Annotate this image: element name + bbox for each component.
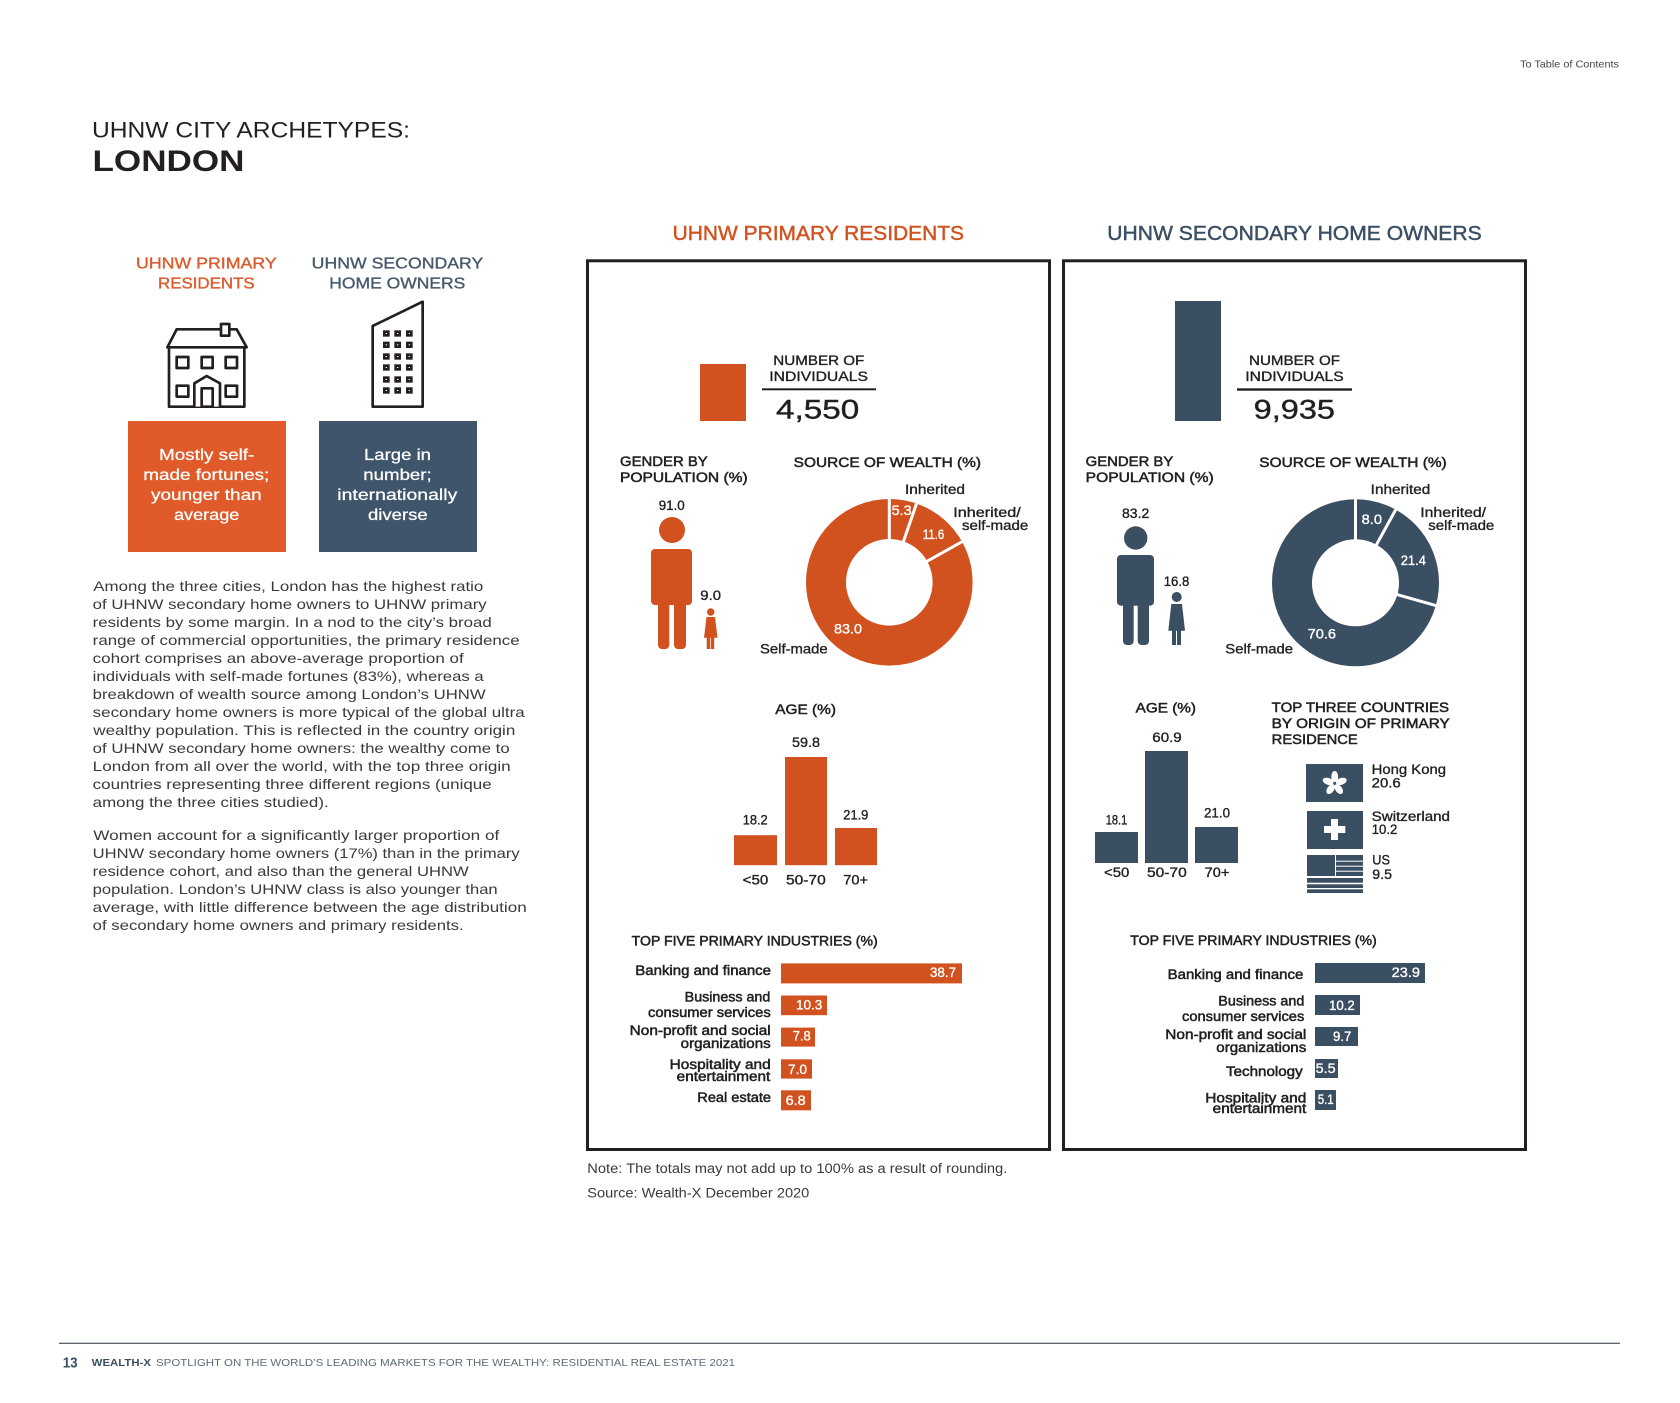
chart: top five primary industries: Banking and finance	[1168, 967, 1303, 982]
icon: woman	[704, 608, 718, 649]
chart: age: 18.2	[743, 812, 768, 828]
callout: secondary home owners summary: internationally	[337, 487, 457, 504]
body text: paragraph one: among the three cities studied).	[93, 794, 329, 810]
body text: paragraph two: residence cohort, and also than the general UHNW	[93, 863, 470, 879]
list: top three countries by origin: BY ORIGIN OF PRIMARY	[1272, 716, 1450, 731]
heading: primary residents	[136, 255, 277, 292]
chart: source of wealth donut: 8.0	[1362, 512, 1382, 527]
chart: source of wealth donut: 5.3	[892, 503, 912, 518]
chart: gender by population: GENDER BY	[1086, 454, 1173, 469]
chart: top five primary industries: 38.7	[930, 965, 956, 980]
chart: source of wealth donut: Inherited/	[1420, 505, 1486, 520]
note and source: Note: The totals may not add up to 100% as a result of rounding.	[587, 1161, 1007, 1176]
body text: paragraph two: of secondary home owners and primary residents.	[93, 917, 464, 933]
list: top three countries by origin	[1272, 700, 1450, 893]
chart: top five primary industries: consumer services	[648, 1005, 771, 1020]
icon: us flag	[1307, 855, 1363, 893]
chart: top five primary industries: consumer services	[1182, 1009, 1305, 1024]
chart: source of wealth donut: 83.0	[834, 622, 862, 637]
body text: paragraph one: residents by some margin. In a nod to the city’s broad	[93, 614, 492, 630]
chart: top five primary industries: TOP FIVE PRIMARY INDUSTRIES (%)	[1130, 933, 1377, 948]
list: top three countries by origin: Hong Kong	[1372, 762, 1446, 777]
icon: switzerland flag	[1307, 811, 1363, 849]
body text: paragraph one: cohort comprises an above-average proportion of	[93, 650, 464, 666]
chart: top five primary industries: Business and	[1218, 993, 1304, 1008]
chart: top five primary industries: organizations	[681, 1036, 771, 1051]
chart: top five primary industries: 6.8	[786, 1093, 806, 1108]
chart: age: <50	[1104, 865, 1129, 880]
body text: paragraph one: wealthy population. This is reflected in the country origin	[92, 722, 515, 738]
body text: paragraph one: individuals with self-made fortunes (83%), whereas a	[93, 668, 484, 684]
callout: primary residents summary: made fortunes;	[143, 467, 269, 484]
chart: top five primary industries: TOP FIVE PRIMARY INDUSTRIES (%)	[632, 934, 878, 948]
chart: age: AGE (%)	[1136, 700, 1196, 715]
metric: number of individuals: 9,935	[1254, 394, 1335, 424]
footer	[59, 1343, 1620, 1372]
chart: top five primary industries: 5.5	[1316, 1061, 1336, 1076]
title: UHNW CITY ARCHETYPES:	[92, 118, 410, 143]
archetype: secondary home owners	[312, 255, 484, 552]
icon: man	[1117, 526, 1154, 645]
metric: number of individuals: 4,550	[776, 394, 859, 424]
chart: top five primary industries: 5.1	[1318, 1092, 1334, 1107]
chart: top five primary industries: entertainment	[1213, 1101, 1307, 1116]
body text: paragraph one: breakdown of wealth source among London’s UHNW	[93, 686, 487, 702]
heading: primary residents: UHNW PRIMARY	[136, 255, 277, 272]
heading: secondary home owners: HOME OWNERS	[329, 275, 465, 292]
chart: age: 21.9	[843, 808, 868, 823]
body text: paragraph two: UHNW secondary home owners (17%) than in the primary	[93, 845, 520, 861]
chart: age: 70+	[1205, 865, 1229, 880]
chart: top five primary industries: Banking and finance	[635, 963, 771, 978]
callout: secondary home owners summary: Large in	[364, 447, 431, 464]
chart: gender by population: 16.8	[1164, 574, 1189, 589]
chart: source of wealth donut	[1225, 455, 1494, 656]
callout: secondary home owners summary	[319, 421, 477, 552]
chart: source of wealth donut	[760, 455, 1028, 656]
note and source: Source: Wealth-X December 2020	[587, 1186, 809, 1201]
chart: source of wealth donut: Inherited	[905, 482, 965, 497]
chart: top five primary industries: organizations	[1216, 1040, 1307, 1055]
icon: tower	[373, 302, 423, 407]
chart: source of wealth donut: 21.4	[1401, 553, 1426, 568]
body text: paragraph one: range of commercial opportunities, the primary residence	[93, 632, 520, 648]
chart: source of wealth donut: SOURCE OF WEALTH (%)	[794, 455, 981, 470]
chart: source of wealth donut: 70.6	[1308, 627, 1336, 642]
chart: gender by population	[620, 454, 748, 649]
chart: source of wealth donut: self-made	[962, 518, 1028, 533]
chart: age	[734, 702, 877, 888]
chart: top five primary industries: Business and	[685, 989, 770, 1004]
chart: gender by population: GENDER BY	[620, 454, 708, 469]
heading: secondary home owners: UHNW SECONDARY	[312, 255, 484, 272]
list: top three countries by origin: 9.5	[1372, 867, 1392, 882]
body text: paragraph one	[92, 578, 525, 810]
chart: top five primary industries: Technology	[1226, 1064, 1303, 1079]
body text: paragraph one: of UHNW secondary home owners to UHNW primary	[93, 596, 487, 612]
body text: paragraph two: Women account for a significantly larger proportion of	[93, 827, 499, 843]
body text: paragraph one: Among the three cities, London has the highest ratio	[93, 578, 484, 594]
body text: paragraph one: secondary home owners is more typical of the global ultra	[93, 704, 525, 720]
panel: primary residents	[588, 261, 1050, 1150]
metric: number of individuals: INDIVIDUALS	[769, 369, 868, 384]
heading: secondary home owners	[312, 255, 484, 292]
body text: paragraph two	[93, 827, 527, 933]
chart: top five primary industries: Hospitality and	[1205, 1090, 1306, 1105]
body text: paragraph two: average, with little difference between the age distribution	[93, 899, 527, 915]
callout: primary residents summary: Mostly self-	[159, 447, 254, 464]
list: top three countries by origin: Switzerland	[1372, 809, 1450, 824]
chart: gender by population: 9.0	[700, 588, 721, 603]
panel: secondary home owners	[1064, 261, 1526, 1150]
icon: house	[167, 324, 247, 407]
icon: hong kong flag	[1306, 764, 1363, 802]
chart: gender by population: POPULATION (%)	[1086, 470, 1214, 485]
callout: primary residents summary: younger than	[151, 487, 262, 504]
chart: top five primary industries	[630, 934, 962, 1110]
chart: age: 50-70	[1147, 865, 1187, 880]
chart: source of wealth donut: Inherited/	[953, 505, 1021, 520]
chart: source of wealth donut: Self-made	[760, 641, 828, 656]
metric: number of individuals	[700, 353, 876, 424]
chart: top five primary industries: 10.3	[796, 997, 822, 1012]
footer text: SPOTLIGHT ON THE WORLD’S LEADING MARKETS FOR THE WEALTHY: RESIDENTIAL REAL ESTATE 2021	[156, 1358, 735, 1369]
chart: age: 60.9	[1152, 730, 1182, 745]
list: top three countries by origin: US	[1372, 853, 1390, 868]
heading: primary residents: RESIDENTS	[158, 275, 255, 292]
title	[92, 118, 410, 178]
note and source	[587, 1161, 1007, 1201]
chart: top five primary industries: Hospitality and	[670, 1057, 771, 1072]
chart: age: 21.0	[1204, 805, 1230, 820]
chart: gender by population: POPULATION (%)	[620, 470, 748, 485]
body text: paragraph one: of UHNW secondary home owners: the wealthy come to	[93, 740, 510, 756]
callout: secondary home owners summary: number;	[363, 467, 432, 484]
chart: top five primary industries: 23.9	[1392, 965, 1420, 980]
chart: top five primary industries: Non-profit and social	[630, 1023, 771, 1038]
chart: top five primary industries: 7.0	[788, 1062, 807, 1077]
page number: 13	[63, 1355, 78, 1372]
link: to table of contents: To Table of Contents	[1520, 59, 1619, 71]
chart: top five primary industries: Real estate	[697, 1090, 771, 1105]
body text: paragraph one: London from all over the world, with the top three origin	[93, 758, 511, 774]
list: top three countries by origin: TOP THREE COUNTRIES	[1272, 700, 1449, 715]
title: LONDON	[92, 145, 244, 178]
chart: age: 59.8	[792, 735, 820, 750]
donut ring	[1292, 496, 1439, 646]
body text: paragraph two: population. London’s UHNW class is also younger than	[93, 881, 498, 897]
chart: gender by population: 91.0	[659, 498, 685, 513]
chart: source of wealth donut: Inherited	[1371, 482, 1430, 497]
metric: number of individuals: INDIVIDUALS	[1245, 369, 1344, 384]
body text: paragraph one: countries representing three different regions (unique	[93, 776, 492, 792]
donut ring	[826, 496, 965, 646]
chart: source of wealth donut: 11.6	[923, 527, 944, 542]
metric: number of individuals: NUMBER OF	[1249, 353, 1340, 368]
list: top three countries by origin: 20.6	[1372, 775, 1401, 790]
icon: man	[651, 517, 692, 649]
chart: age: 70+	[843, 872, 868, 888]
list: top three countries by origin: RESIDENCE	[1272, 732, 1358, 747]
archetype: primary residents	[128, 255, 286, 552]
chart: age	[1095, 700, 1238, 880]
chart: gender by population	[1086, 454, 1214, 645]
callout: primary residents summary: average	[174, 507, 239, 524]
callout: primary residents summary	[128, 421, 286, 552]
footer text: WEALTH-X	[92, 1358, 151, 1369]
heading: secondary home owners panel: UHNW SECONDARY HOME OWNERS	[1107, 222, 1482, 245]
icon: woman	[1168, 592, 1185, 645]
chart: top five primary industries: 10.2	[1329, 998, 1355, 1013]
chart: top five primary industries: 9.7	[1333, 1029, 1351, 1044]
chart: top five primary industries: 7.8	[793, 1028, 811, 1043]
chart: top five primary industries: entertainment	[677, 1069, 771, 1084]
chart: top five primary industries: Non-profit and social	[1165, 1027, 1306, 1042]
chart: gender by population: 83.2	[1122, 506, 1149, 521]
chart: source of wealth donut: SOURCE OF WEALTH (%)	[1259, 455, 1447, 470]
chart: top five primary industries	[1130, 933, 1425, 1116]
chart: source of wealth donut: Self-made	[1225, 641, 1293, 656]
metric: number of individuals: NUMBER OF	[773, 353, 864, 368]
chart: age: AGE (%)	[775, 702, 836, 717]
chart: age: 18.1	[1106, 812, 1127, 827]
chart: age: 50-70	[786, 872, 826, 888]
heading: primary residents panel: UHNW PRIMARY RESIDENTS	[673, 222, 964, 245]
callout: secondary home owners summary: diverse	[368, 507, 428, 524]
chart: source of wealth donut: self-made	[1428, 518, 1494, 533]
metric: number of individuals	[1175, 301, 1352, 424]
chart: age: <50	[743, 872, 768, 888]
list: top three countries by origin: 10.2	[1372, 822, 1397, 837]
